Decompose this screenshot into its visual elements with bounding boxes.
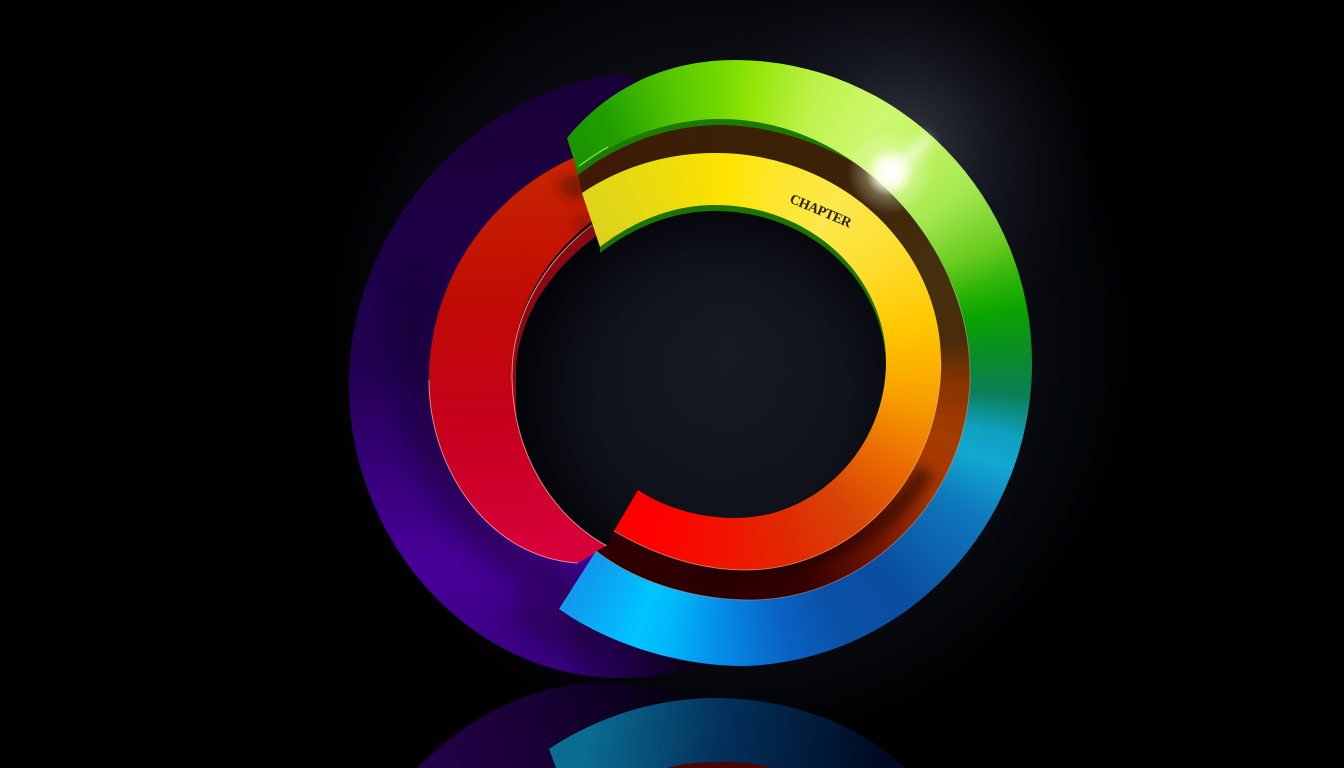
green to blue outer ring <box>559 60 1032 666</box>
dark shadow band between rings <box>577 125 970 600</box>
yellow to red inner ring <box>582 153 941 570</box>
chapter label: CHAPTER <box>787 192 853 231</box>
band shading and ring side faces <box>577 119 938 578</box>
purple outer crescent <box>349 73 710 678</box>
